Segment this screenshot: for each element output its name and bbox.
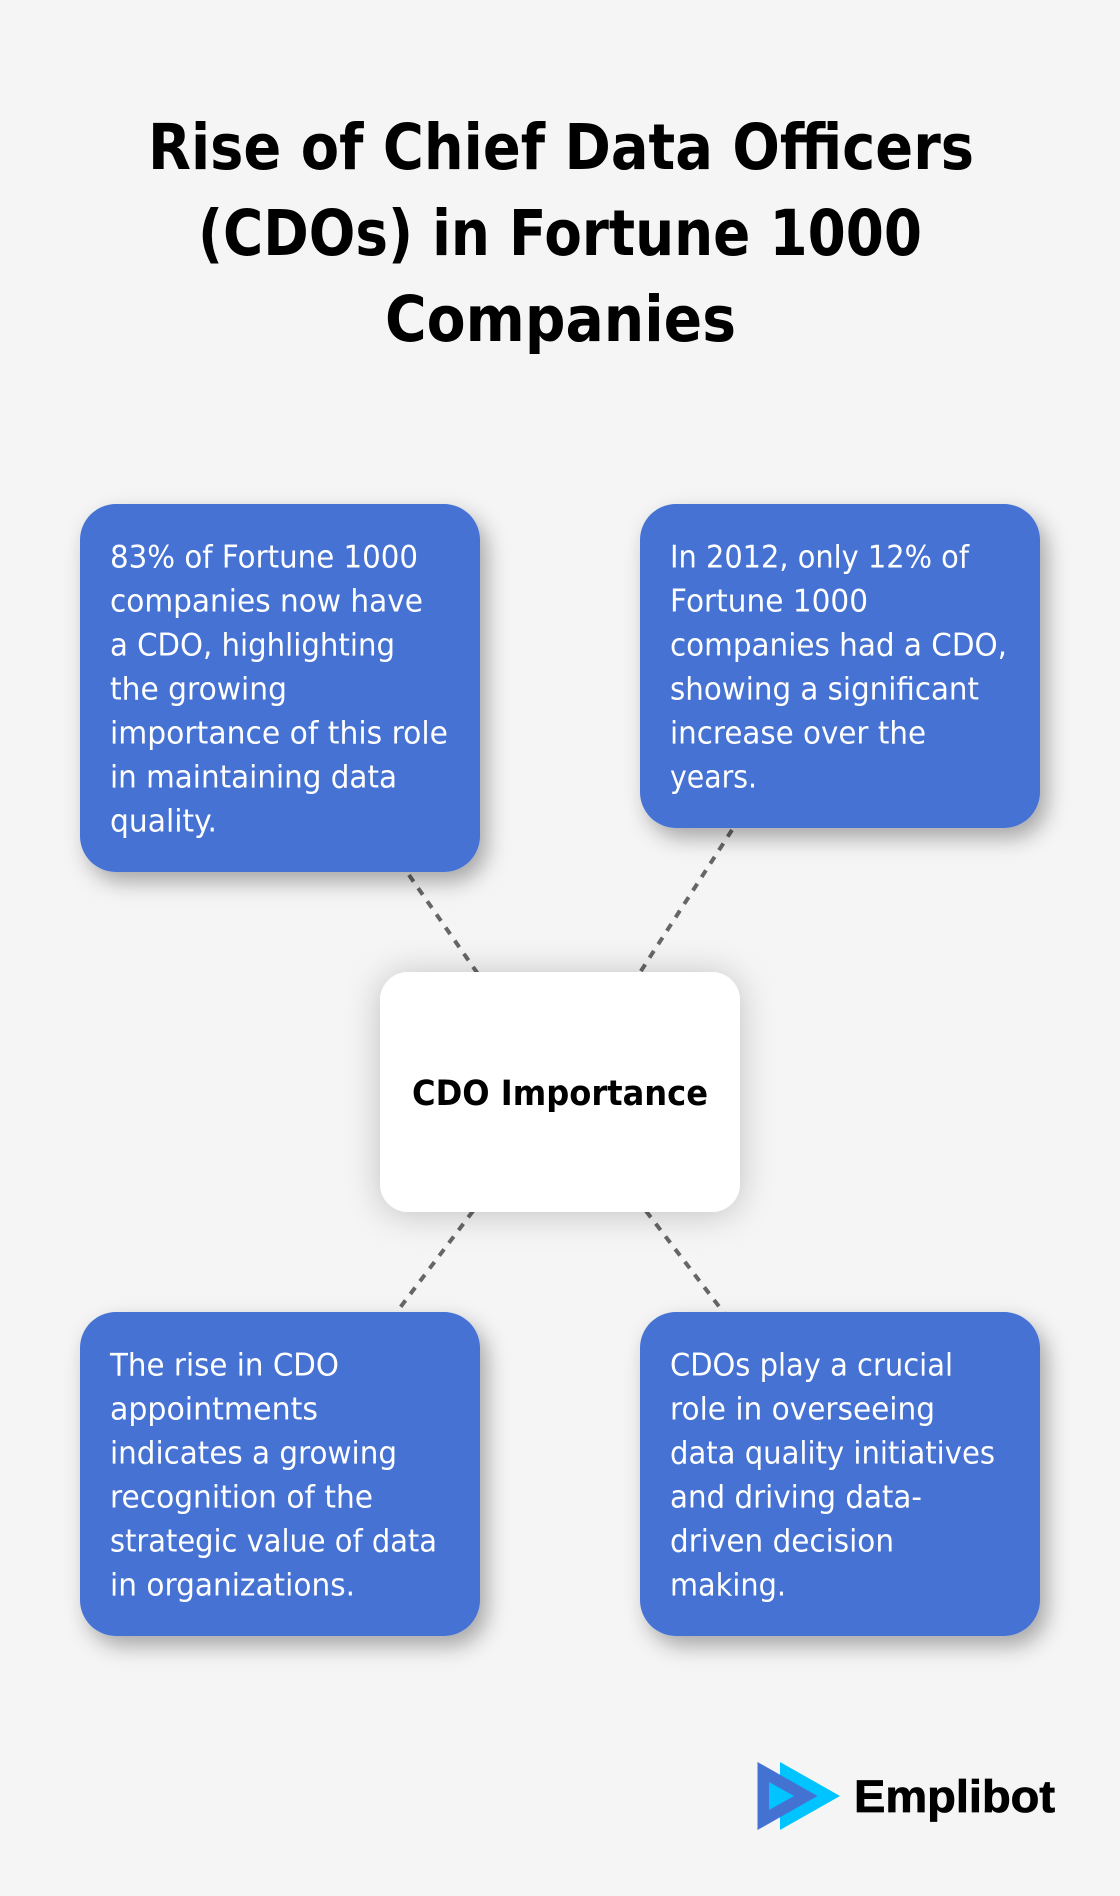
panel: In 2012 only 12%: years. bbox=[670, 760, 757, 796]
panel: In 2012 only 12%: companies had a CDO, bbox=[670, 628, 1007, 664]
panel: CDOs play a crucial role: driven decision bbox=[670, 1524, 894, 1560]
panel: In 2012 only 12%: Fortune 1000 bbox=[670, 584, 868, 620]
panel: CDOs play a crucial role: data quality initiatives bbox=[670, 1436, 995, 1472]
panel: In 2012 only 12%: showing a significant bbox=[670, 672, 979, 708]
panel: 83% of Fortune 1000: 83% of Fortune 1000 bbox=[110, 540, 418, 576]
dashed connectors bbox=[396, 830, 732, 1313]
panel: rise in CDO appointments: indicates a growing bbox=[110, 1436, 397, 1472]
logo wordmark: Emplibot bbox=[854, 1771, 1055, 1822]
panel: CDOs play a crucial role: role in overseeing bbox=[670, 1392, 935, 1428]
panel: CDOs play a crucial role: CDOs play a crucial bbox=[670, 1348, 953, 1384]
panel: 83% of Fortune 1000: in maintaining data bbox=[110, 760, 397, 796]
panel: CDOs play a crucial role: and driving data- bbox=[670, 1480, 922, 1516]
panel: In 2012 only 12%: In 2012, only 12% of bbox=[670, 540, 970, 576]
panel: 83% of Fortune 1000: importance of this role bbox=[110, 716, 448, 752]
panel: rise in CDO appointments: strategic value of data bbox=[110, 1524, 437, 1560]
panel: 83% of Fortune 1000: companies now have bbox=[110, 584, 423, 620]
panel: rise in CDO appointments: recognition of the bbox=[110, 1480, 373, 1516]
panel: rise in CDO appointments: The rise in CDO bbox=[109, 1348, 339, 1384]
panel: CDO Importance center bbox=[380, 972, 740, 1212]
panel: 83% of Fortune 1000: quality. bbox=[110, 804, 217, 840]
title: Rise of Chief Data Officers bbox=[148, 111, 974, 184]
panel: rise in CDO appointments: appointments bbox=[110, 1392, 318, 1428]
panel: CDOs play a crucial role bbox=[640, 1312, 1040, 1636]
panel: CDO Importance center: CDO Importance bbox=[412, 1074, 708, 1114]
panel: rise in CDO appointments bbox=[80, 1312, 480, 1636]
panel: 83% of Fortune 1000 bbox=[80, 504, 480, 872]
panel: 83% of Fortune 1000: a CDO, highlighting bbox=[110, 628, 395, 664]
panel: In 2012 only 12% bbox=[640, 504, 1040, 828]
panel: rise in CDO appointments: in organizations. bbox=[110, 1568, 355, 1604]
panel: CDOs play a crucial role: making. bbox=[670, 1568, 786, 1604]
title: Companies bbox=[385, 283, 736, 356]
icon: Emplibot logo bbox=[758, 1762, 840, 1830]
title bbox=[148, 111, 974, 356]
panel: 83% of Fortune 1000: the growing bbox=[110, 672, 287, 708]
panel: In 2012 only 12%: increase over the bbox=[670, 716, 926, 752]
title: (CDOs) in Fortune 1000 bbox=[198, 197, 922, 270]
